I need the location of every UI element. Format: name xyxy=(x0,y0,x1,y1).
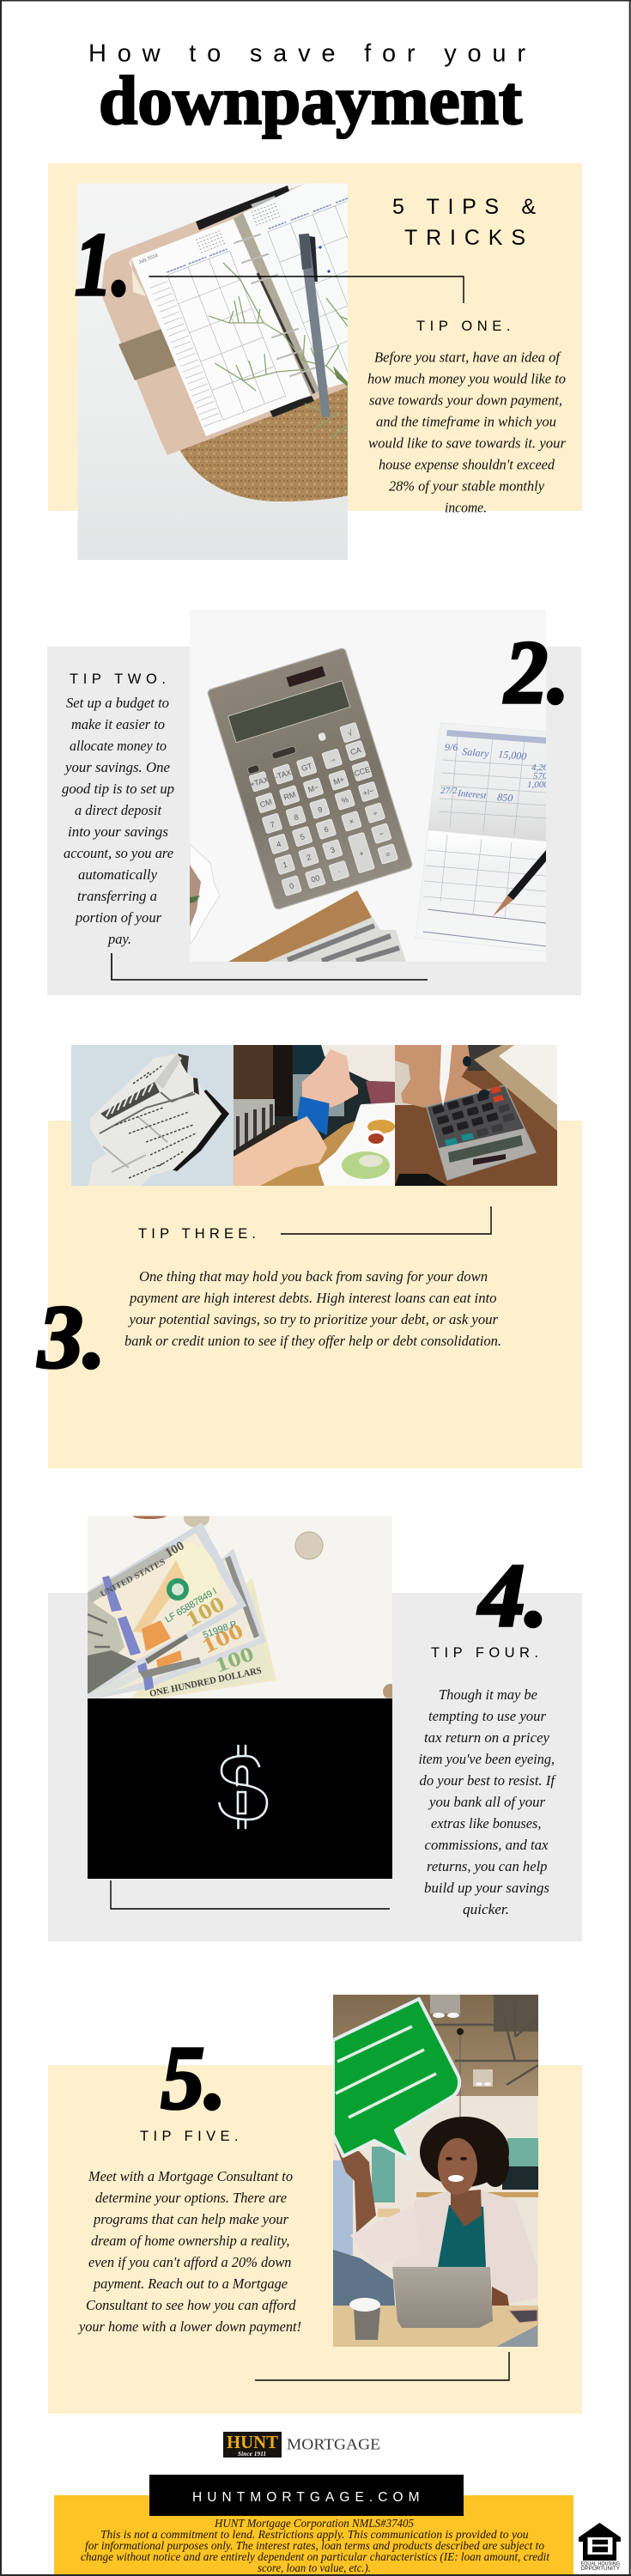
disclaimer text xyxy=(81,2517,550,2574)
tip four body: quicker. xyxy=(463,1901,509,1917)
tip three body: payment are high interest debts. High interest loans can eat into xyxy=(129,1290,496,1306)
tip four body: do your best to resist. If xyxy=(419,1772,556,1789)
photo: calculator with pen xyxy=(395,1045,557,1186)
photo: calculator and ledger: 8 xyxy=(293,812,300,822)
footer bar: disclaimer xyxy=(54,2475,573,2574)
disclaimer text: for informational purposes only. The interest rates, loan terms and products described are subject to xyxy=(85,2539,544,2552)
tip two body: pay. xyxy=(107,931,131,947)
panel background: cream xyxy=(48,1121,582,1468)
number 1: 1. xyxy=(75,214,130,314)
tip two body: your savings. One xyxy=(64,759,170,775)
photo: calculator and ledger: +TAX xyxy=(249,775,270,789)
tip three body: bank or credit union to see if they offer help or debt consolidation. xyxy=(124,1333,501,1349)
tip two body: into your savings xyxy=(68,823,168,840)
photo: calculator and ledger: 5 xyxy=(299,832,306,841)
tip four body: Though it may be xyxy=(439,1686,537,1703)
photo: dollar bills: UNITED STATES xyxy=(99,1557,167,1600)
photo: calculator and ledger: − xyxy=(378,829,385,839)
panel: tip one xyxy=(48,163,582,560)
panel background: cream xyxy=(48,2065,582,2414)
photo: woman with speech bubble xyxy=(333,1995,538,2347)
photo: calculator and ledger: → xyxy=(327,754,337,764)
website button xyxy=(149,2475,464,2516)
photo: planner on cork xyxy=(77,184,348,560)
photo: calculator and ledger: × xyxy=(349,817,355,826)
number 4: 4. xyxy=(477,1545,548,1645)
photo: calculator and ledger: % xyxy=(341,795,349,805)
tip two body: Set up a budget to xyxy=(66,695,169,711)
tip three body xyxy=(124,1268,501,1349)
photo: calculator and ledger: 850 xyxy=(497,791,513,805)
photo: calculator and ledger: 3 xyxy=(330,845,336,854)
number 5: 5. xyxy=(161,2027,227,2128)
photo: dollar bills: ONE HUNDRED DOLLARS xyxy=(149,1666,263,1699)
tip one body: how much money you would like to xyxy=(367,371,566,386)
panel background: grey xyxy=(48,1593,582,1941)
number 2: 2. xyxy=(503,622,569,722)
photo: calculator and ledger: . xyxy=(337,866,341,874)
connector line xyxy=(281,1206,491,1234)
number 3: 3. xyxy=(38,1286,106,1387)
disclaimer text: HUNT Mortgage Corporation NMLS#37405 xyxy=(214,2517,414,2530)
icon: equal housing opportunity xyxy=(579,2523,621,2572)
tip five body: determine your options. There are xyxy=(95,2190,287,2206)
tip three body: your potential savings, so try to prioritize your debt, or ask your xyxy=(127,1311,499,1327)
photo: calculator and ledger: + xyxy=(358,848,365,859)
photo: calculator and ledger: 4,20 xyxy=(531,762,549,773)
tip one body: would like to save towards it. your xyxy=(368,434,567,452)
tip one heading: TIP ONE. xyxy=(416,319,510,334)
photo: calculator and ledger: = xyxy=(385,849,391,860)
tip two body: good tip is to set up xyxy=(62,781,174,797)
title line: downpayment: downpayment xyxy=(99,64,522,139)
photo: calculator and ledger: 00 xyxy=(310,873,321,884)
tip five body: even if you can't afford a 20% down xyxy=(88,2254,292,2270)
tip two body: automatically xyxy=(78,866,158,883)
photo: calculator and ledger: 15,000 xyxy=(498,748,527,762)
tip five body: dream of home ownership a reality, xyxy=(91,2233,290,2249)
title line: how to save: How to save for your xyxy=(88,39,525,67)
tip two body: portion of your xyxy=(75,909,162,926)
connector line xyxy=(255,2352,509,2380)
photo: dollar bills xyxy=(88,1509,398,1699)
photo: dollar bills: 100 xyxy=(212,1643,257,1678)
photo: calculator and ledger: GT xyxy=(300,762,313,773)
tip one body: house expense shouldn't exceed xyxy=(379,457,555,472)
photo: calculator and ledger: M+ xyxy=(332,775,345,787)
photo: calculator and ledger: Interest xyxy=(457,788,488,801)
tip two heading: TIP TWO. xyxy=(70,671,166,687)
tip three heading: TIP THREE. xyxy=(138,1226,256,1242)
logo: hunt mortgage: Since 1911 xyxy=(238,2451,266,2458)
tip one body: income. xyxy=(445,500,487,515)
website button: HUNTMORTGAGE.COM xyxy=(192,2490,419,2505)
photo: calculator and ledger: CM xyxy=(259,798,273,809)
photo: paying with credit card xyxy=(234,1045,395,1186)
photo: calculator and ledger: RM xyxy=(282,790,297,802)
connector line xyxy=(112,953,428,980)
logo: hunt mortgage xyxy=(223,2432,380,2458)
tip four body: commissions, and tax xyxy=(424,1837,549,1853)
tip four heading: TIP FOUR. xyxy=(431,1645,538,1661)
logo: hunt mortgage: MORTGAGE xyxy=(287,2435,380,2452)
tip five body: payment. Reach out to a Mortgage xyxy=(93,2275,288,2292)
photo: calculator and ledger: 1 xyxy=(282,860,288,870)
tip three body: One thing that may hold you back from saving for your down xyxy=(139,1268,488,1285)
photo: calculator and ledger: 6 xyxy=(323,824,330,835)
tip two body: a direct deposit xyxy=(75,802,161,818)
tip two body: transferring a xyxy=(77,888,157,904)
panel: tip five xyxy=(48,1995,582,2414)
tip five body: Meet with a Mortgage Consultant to xyxy=(88,2168,293,2184)
tip one body: save towards your down payment, xyxy=(369,392,562,409)
tip one body: Before you start, have an idea of xyxy=(374,349,561,366)
subtitle: 5 tips and tricks xyxy=(392,195,536,250)
tip four body: tempting to use your xyxy=(428,1708,547,1724)
tip two body xyxy=(62,695,174,947)
tip two body: account, so you are xyxy=(64,845,173,861)
photo: calculator and ledger: ÷ xyxy=(372,809,379,818)
disclaimer text: change without notice and are entirely dependent on particular characteristics (IE: loan amount, credit xyxy=(81,2550,550,2563)
tip two body: make it easier to xyxy=(71,716,165,732)
subtitle: 5 tips and tricks: 5 TIPS & xyxy=(392,195,536,219)
photo: calculator and ledger: -TAX xyxy=(274,768,293,781)
tip one body: 28% of your stable monthly xyxy=(389,477,545,495)
tip two body: allocate money to xyxy=(70,738,167,754)
photo: calculator and ledger: 9/6 xyxy=(445,741,458,753)
tip one body xyxy=(367,349,567,515)
photo: neon dollar sign xyxy=(88,1698,392,1879)
subtitle: 5 tips and tricks: TRICKS xyxy=(404,226,525,250)
photo: calculator and ledger: M− xyxy=(307,783,320,794)
photo: calculator and ledger: 0 xyxy=(288,881,295,890)
panel: tip two xyxy=(47,610,581,995)
logo: hunt mortgage: HUNT xyxy=(227,2432,278,2452)
tip five body: programs that can help make your xyxy=(93,2211,289,2227)
photo: dollar bills: 100 xyxy=(198,1619,247,1658)
tip four body: item you've been eyeing, xyxy=(419,1751,555,1767)
tip four body xyxy=(419,1686,556,1917)
photo: calculator and ledger xyxy=(190,610,549,962)
photo: calculator and ledger: 2 xyxy=(306,853,312,862)
photo: calculator and ledger: CCE xyxy=(353,765,371,778)
tip four body: extras like bonuses, xyxy=(431,1815,541,1832)
photo: calculator and ledger: 570 xyxy=(533,771,548,781)
disclaimer text: score, loan to value, etc.). xyxy=(258,2561,371,2574)
tip four body: build up your savings xyxy=(424,1880,549,1896)
tip four body: you bank all of your xyxy=(428,1794,546,1810)
connector line xyxy=(111,1880,390,1909)
connector line xyxy=(149,276,464,303)
disclaimer text: This is not a commitment to lend. Restrictions apply. This communication is provided to you xyxy=(100,2528,529,2541)
photo: crumpled receipt xyxy=(71,1045,234,1186)
tip five body: your home with a lower down payment! xyxy=(77,2318,301,2335)
photo: calculator and ledger: 7 xyxy=(270,820,276,829)
photo: calculator and ledger: 27/2 xyxy=(440,786,458,796)
photo: calculator and ledger: Salary xyxy=(462,745,490,760)
photo: calculator and ledger: +/− xyxy=(362,787,375,798)
photo: calculator and ledger: √ xyxy=(347,728,354,738)
photo: dollar bills: 100 xyxy=(163,1539,186,1560)
icon: equal housing opportunity: EQUAL HOUSING xyxy=(580,2562,620,2567)
photo: calculator and ledger: 1,000 xyxy=(527,780,549,790)
photo: dollar bills: 100 xyxy=(182,1592,228,1631)
title xyxy=(88,39,525,139)
photo: calculator and ledger: CA xyxy=(349,745,362,756)
tip one body: and the timeframe in which you xyxy=(376,414,556,429)
tip five heading: TIP FIVE. xyxy=(140,2129,239,2144)
panel background: grey xyxy=(47,647,581,995)
tip four body: tax return on a pricey xyxy=(424,1729,550,1746)
photo: calculator and ledger: 9 xyxy=(317,805,324,815)
panel: tip four xyxy=(48,1509,582,1941)
tip five body xyxy=(77,2168,301,2335)
panel: tip three xyxy=(38,1045,582,1468)
icon: equal housing opportunity: OPPORTUNITY xyxy=(580,2567,620,2572)
photo: calculator and ledger: 4 xyxy=(276,840,282,849)
panel background: cream xyxy=(48,163,582,511)
tip five body: Consultant to see how you can afford xyxy=(86,2297,296,2313)
photo: planner on cork: July 2018 xyxy=(138,253,159,265)
tip four body: returns, you can help xyxy=(427,1858,548,1874)
photo: dollar bills: 51998 P xyxy=(202,1619,239,1641)
photo: dollar bills: LF 65887849 I xyxy=(163,1586,219,1625)
